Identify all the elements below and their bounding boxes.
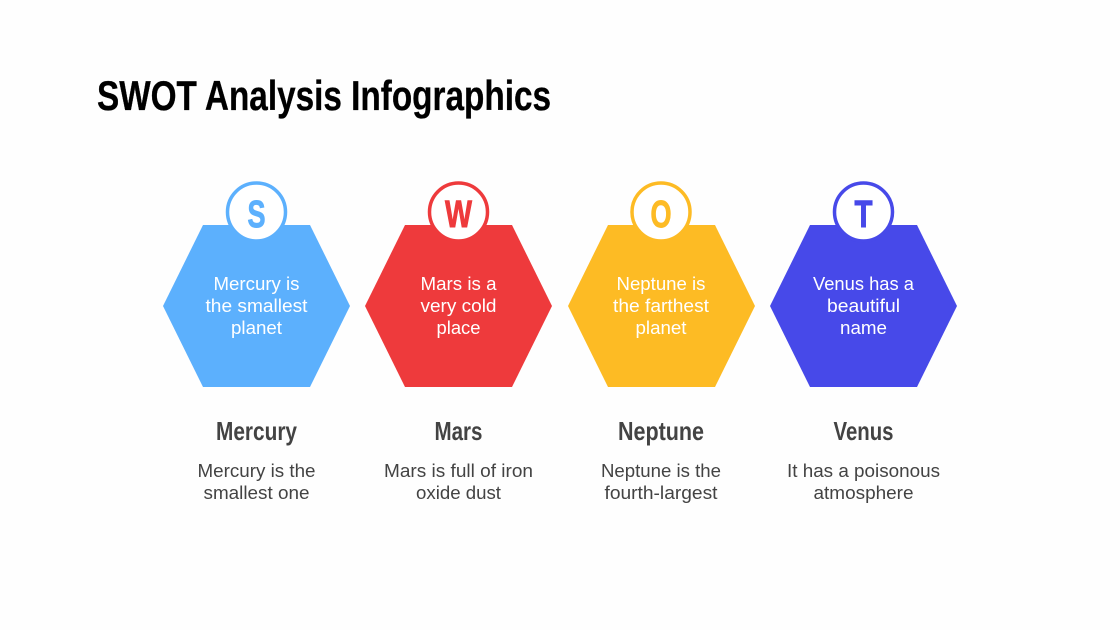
heading: Neptune: Neptune: [618, 416, 704, 446]
hexagon text: planet: [636, 317, 686, 338]
icon: letter S badge: [228, 183, 286, 241]
panel: threats (Venus): [770, 183, 957, 503]
icon: letter T badge: [834, 183, 892, 241]
hexagon text: Neptune is: [616, 273, 706, 294]
hexagon text: [206, 273, 308, 338]
hexagon text: Venus has a: [813, 273, 915, 294]
hexagon text: [420, 273, 497, 338]
hexagon: blue: [163, 225, 350, 387]
hexagon text: beautiful: [827, 295, 900, 316]
hexagon text: place: [436, 317, 480, 338]
description: Neptune is the: [601, 460, 721, 481]
description: atmosphere: [814, 482, 914, 503]
hexagon: red: [365, 225, 552, 387]
description: [384, 460, 533, 503]
icon: letter O badge: O: [650, 194, 672, 236]
hexagon text: very cold: [420, 295, 496, 316]
icon: letter W badge: W: [445, 194, 472, 236]
hexagon text: the farthest: [613, 295, 709, 316]
hexagon text: the smallest: [206, 295, 308, 316]
description: [601, 460, 721, 503]
panel: opportunities (Neptune): [568, 183, 755, 503]
hexagon text: name: [840, 317, 887, 338]
icon: letter T badge: T: [854, 194, 872, 236]
panel: strengths (Mercury): [163, 183, 350, 503]
hexagon: indigo: [770, 225, 957, 387]
hexagon text: Mercury is: [214, 273, 300, 294]
panel: weaknesses (Mars): [365, 183, 552, 503]
heading: Mars: Mars: [434, 416, 482, 446]
title: SWOT Analysis Infographics: [97, 72, 551, 119]
icon: letter O badge: [632, 183, 690, 241]
description: [787, 460, 940, 503]
description: smallest one: [204, 482, 310, 503]
hexagon text: [613, 273, 709, 338]
hexagon: yellow: [568, 225, 755, 387]
hexagon text: [813, 273, 915, 338]
description: oxide dust: [416, 482, 501, 503]
description: It has a poisonous: [787, 460, 940, 481]
icon: letter W badge: [430, 183, 488, 241]
description: Mercury is the: [198, 460, 316, 481]
description: Mars is full of iron: [384, 460, 533, 481]
description: [198, 460, 316, 503]
heading: Mercury: Mercury: [216, 416, 297, 446]
description: fourth-largest: [604, 482, 718, 503]
icon: letter S badge: S: [248, 194, 266, 236]
hexagon text: Mars is a: [420, 273, 497, 294]
heading: Venus: Venus: [834, 416, 894, 446]
hexagon text: planet: [231, 317, 282, 338]
